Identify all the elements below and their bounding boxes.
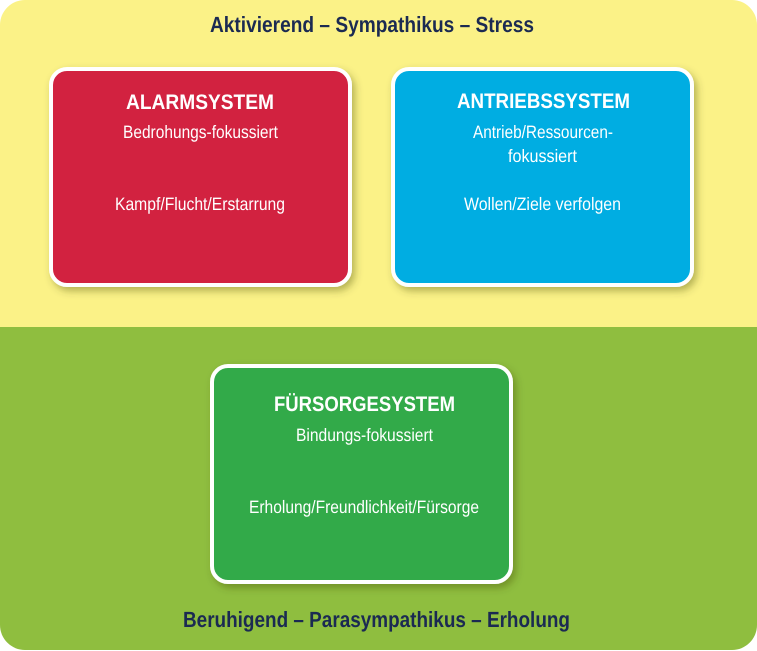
drive focus: Antrieb/Ressourcen- (473, 122, 613, 142)
drive focus: fokussiert (508, 146, 577, 166)
panel: care system (212, 366, 511, 582)
alarm behaviours: Kampf/Flucht/Erstarrung (115, 194, 285, 214)
panel: calming zone (0, 327, 757, 651)
alarm heading: ALARMSYSTEM (126, 91, 274, 114)
care behaviours: Erholung/Freundlichkeit/Fürsorge (249, 497, 479, 517)
drive focus (473, 122, 613, 166)
drive heading: ANTRIEBSSYSTEM (457, 90, 630, 113)
care focus: Bindungs-fokussiert (296, 425, 433, 445)
heading: calming: Beruhigend – Parasympathikus – Erholung (183, 607, 570, 632)
panel: drive system (393, 69, 692, 285)
care heading: FÜRSORGESYSTEM (274, 393, 455, 416)
drive behaviours: Wollen/Ziele verfolgen (464, 194, 621, 214)
panel: alarm system (51, 69, 350, 285)
alarm focus: Bedrohungs-fokussiert (123, 122, 278, 142)
panel: activating zone (0, 0, 757, 328)
heading: activating: Aktivierend – Sympathikus – Stress (210, 12, 534, 37)
